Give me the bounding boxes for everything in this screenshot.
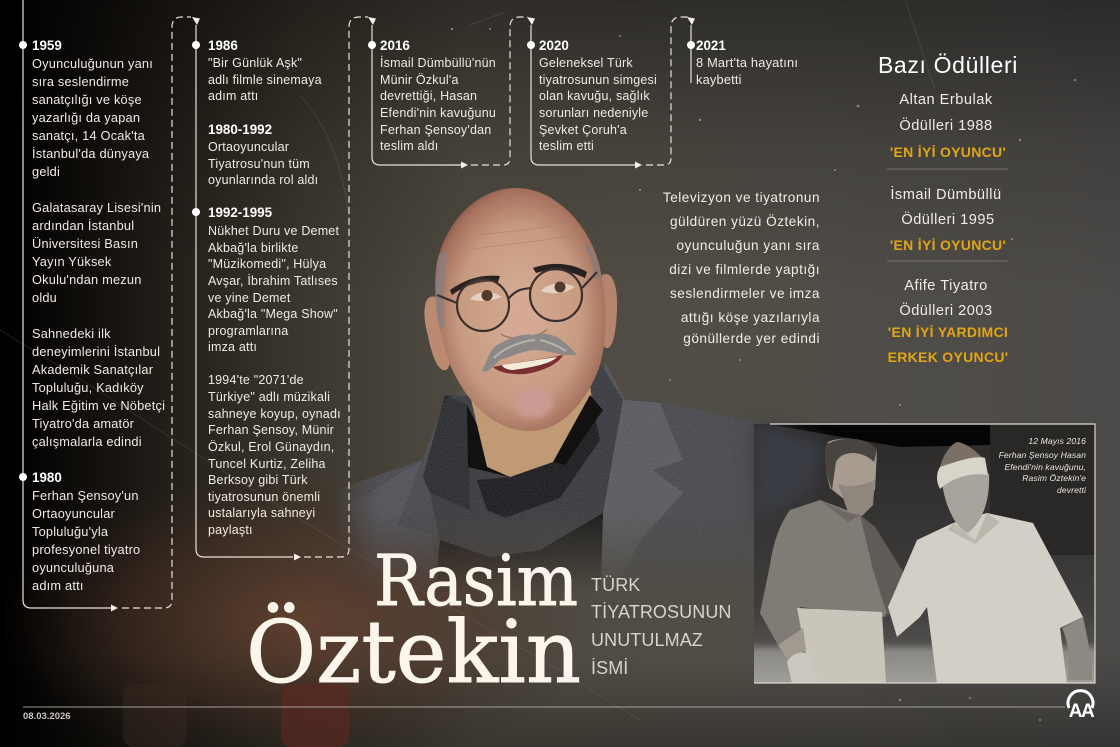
timeline column: 2021 [696,38,798,87]
timeline column: 1986 to 1995: "Bir Günlük Aşk" [208,56,302,70]
timeline column: 1959 and 1980: Ferhan Şensoy'un [32,488,139,503]
timeline column: 1959 and 1980: Yayın Yüksek [32,254,112,269]
timeline column: 1986 to 1995: Özkul, Erol Günaydın, [208,440,334,454]
timeline column: 1986 to 1995: Ortaoyuncular [208,140,289,154]
timeline column: 1959 and 1980: ardından İstanbul [32,218,134,233]
cheeks and nose [500,294,547,337]
timeline column: 1986 to 1995: Avşar, İbrahim Tatlıses [208,274,338,288]
logo: AA: AA [1069,701,1095,722]
intro paragraph: oyunculuğun yanı sıra [676,238,820,253]
person: Ferhan Şensoy [760,439,903,683]
timeline column: 1959 and 1980: Ortaoyuncular [32,506,116,521]
timeline column: 2016 [380,38,496,153]
timeline column: 2021: kaybetti [696,72,742,87]
panel: awards: 'EN İYİ OYUNCU' [890,237,1006,253]
intro paragraph: güldüren yüzü Öztekin, [670,214,820,229]
timeline column: 2016: İsmail Dümbüllü'nün [380,56,496,70]
timeline column: 1959 and 1980: 1980 [32,470,62,485]
subtitle: TÜRK [591,575,640,595]
timeline column: 1959 and 1980: Tiyatro'da amatör [32,416,135,431]
timeline column: 1959 and 1980: oldu [32,290,57,305]
hair at sides [435,250,448,330]
timeline column: 1986 to 1995: Nükhet Duru ve Demet [208,224,339,238]
panel: awards: Afife Tiyatro [904,278,988,294]
portrait of Rasim Öztekin [338,188,760,582]
panel: awards: 'EN İYİ OYUNCU' [890,144,1006,160]
panel: awards: ERKEK OYUNCU' [888,349,1008,365]
inset caption [999,436,1087,495]
timeline column: 1959 and 1980: yazarlığı da yapan [32,110,140,125]
timeline column: 1986 to 1995: adım attı [208,89,258,103]
timeline column: 1986 to 1995: 1986 [208,38,238,53]
timeline column: 1986 to 1995: Berksoy gibi Türk [208,473,308,487]
timeline column: 1959 and 1980: İstanbul'da dünyaya [32,146,150,161]
mustache [482,334,577,372]
date: 08.03.2026 [23,711,71,722]
timeline column: 1986 to 1995: 1980-1992 [208,122,272,137]
ears [424,296,451,370]
timeline column: 1986 to 1995: oyunlarında rol aldı [208,173,318,187]
timeline column: 1959 and 1980: Okulu'ndan mezun [32,272,142,287]
timeline column: 2016: teslim aldı [380,139,438,153]
panel: awards: Altan Erbulak [899,92,993,108]
title [246,540,581,703]
intro paragraph: gönüllerde yer edindi [683,331,820,346]
timeline column: 1986 to 1995: ustalarıyla sahneyi [208,506,315,520]
timeline column: 1959 and 1980: sıra seslendirme [32,74,129,89]
inset photo [750,424,1095,683]
subtitle: İSMİ [591,658,628,678]
panel: awards [878,52,1018,365]
timeline column: 1986 to 1995: tiyatrosunun önemli [208,490,320,504]
logo: AA [1068,691,1095,722]
subtitle: TİYATROSUNUN [591,602,732,622]
timeline column: 1986 to 1995 [208,38,341,537]
timeline column: 2016: devrettiği, Hasan [380,89,477,103]
timeline column: 1959 and 1980: Topluluğu'yla [32,524,109,539]
inset caption: Rasim Öztekin'e [1022,473,1086,483]
timeline column: 2020: Şevket Çoruh'a [539,123,627,137]
inset caption: devretti [1057,485,1087,495]
jacket [338,362,760,582]
timeline column: 2016: Ferhan Şensoy'dan [380,123,491,137]
intro paragraph: Televizyon ve tiyatronun [663,190,820,205]
timeline column: 1986 to 1995: sahneye koyup, oynadı [208,407,341,421]
timeline column: 1959 and 1980: Halk Eğitim ve Nöbetçi [32,398,165,413]
timeline column: 1986 to 1995: adlı filmle sinemaya [208,73,322,87]
timeline column: 1986 to 1995: Türkiye" adlı müzikali [208,390,330,404]
timeline column: 1986 to 1995: Ferhan Şensoy, Münir [208,423,334,437]
person: Rasim Öztekin [888,442,1092,683]
footer rule [23,706,1065,708]
timeline column: 1986 to 1995: imza attı [208,340,257,354]
head [435,188,606,431]
timeline column: 2020: 2020 [539,38,569,53]
timeline column: 1959 and 1980: sanatçı, 14 Ocak'ta [32,128,146,143]
panel: awards: İsmail Dümbüllü [890,185,1002,203]
timeline connectors [19,0,695,612]
smile [493,355,563,374]
subtitle: UNUTULMAZ [591,630,703,650]
timeline column: 2020 [539,38,657,153]
timeline column: 1986 to 1995: "Müzikomedi", Hülya [208,257,326,271]
timeline column: 2020: Geleneksel Türk [539,56,633,70]
neck [470,385,593,477]
timeline column: 1986 to 1995: 1992-1995 [208,205,273,220]
glasses lenses and eyes [437,269,597,331]
timeline column: 1959 and 1980: Akademik Sanatçılar [32,362,154,377]
intro paragraph: dizi ve filmlerde yaptığı [669,262,820,277]
timeline column: 1959 and 1980: 1959 [32,38,62,53]
timeline column: 1986 to 1995: programlarına [208,324,288,338]
timeline column: 1986 to 1995: Tiyatrosu'nun tüm [208,157,310,171]
subtitle [591,575,732,678]
timeline column: 2020: teslim etti [539,139,594,153]
timeline column: 1959 and 1980: Üniversitesi Basın [32,236,138,251]
timeline column: 1986 to 1995: Akbağ'la birlikte [208,241,299,255]
intro paragraph [663,190,820,346]
timeline column: 1959 and 1980: geldi [32,164,60,179]
timeline column: 1986 to 1995: ve yine Demet [208,291,291,305]
inset caption: Efendi'nin kavuğunu, [1004,462,1086,472]
timeline column: 2016: 2016 [380,38,410,53]
timeline column: 1959 and 1980: Oyunculuğunun yanı [32,56,153,71]
timeline column: 2016: Münir Özkul'a [380,73,459,87]
inset caption: Ferhan Şensoy Hasan [999,450,1086,460]
timeline column: 1959 and 1980: sanatçılığı ve köşe [32,92,142,107]
timeline column: 2016: Efendi'nin kavuğunu [380,106,496,120]
heading: awards: Bazı Ödülleri [878,52,1018,78]
timeline column: 1959 and 1980: Topluluğu, Kadıköy [32,380,144,395]
timeline column: 2021: 2021 [696,38,726,53]
timeline column: 1959 and 1980: Galatasaray Lisesi'nin [32,200,161,215]
panel: awards: Ödülleri 1988 [899,116,993,134]
timeline column: 1959 and 1980: profesyonel tiyatro [32,542,140,557]
eyebrows [450,276,500,295]
timeline column: 1959 and 1980 [32,38,165,593]
timeline column: 2020: sorunları nedeniyle [539,106,648,120]
title: Rasim [374,540,578,622]
panel: awards: 'EN İYİ YARDIMCI [888,324,1008,340]
timeline column: 2020: olan kavuğu, sağlık [539,89,650,103]
intro paragraph: seslendirmeler ve imza [670,286,820,301]
title: Öztekin [246,603,581,703]
timeline column: 1986 to 1995: Tuncel Kurtiz, Zeliha [208,457,326,471]
timeline column: 1959 and 1980: Sahnedeki ilk [32,326,111,341]
panel: awards: Ödülleri 2003 [899,301,993,319]
inset caption: 12 Mayıs 2016 [1028,436,1086,446]
panel: awards: Ödülleri 1995 [901,210,995,228]
timeline column: 1959 and 1980: çalışmalarla edindi [32,434,142,449]
timeline column: 1959 and 1980: deneyimlerini İstanbul [32,344,160,359]
timeline column: 1986 to 1995: 1994'te "2071'de [208,373,304,387]
timeline column: 1986 to 1995: Akbağ'la "Mega Show" [208,307,338,321]
shoulder overlap [750,424,825,525]
timeline column: 2020: tiyatrosunun simgesi [539,73,657,87]
intro paragraph: attığı köşe yazılarıyla [681,310,820,325]
forehead lines [470,226,570,250]
timeline column: 1986 to 1995: paylaştı [208,523,253,537]
timeline column: 1959 and 1980: oyunculuğuna [32,560,115,575]
timeline column: 2021: 8 Mart'ta hayatını [696,55,798,70]
timeline column: 1959 and 1980: adım attı [32,578,84,593]
